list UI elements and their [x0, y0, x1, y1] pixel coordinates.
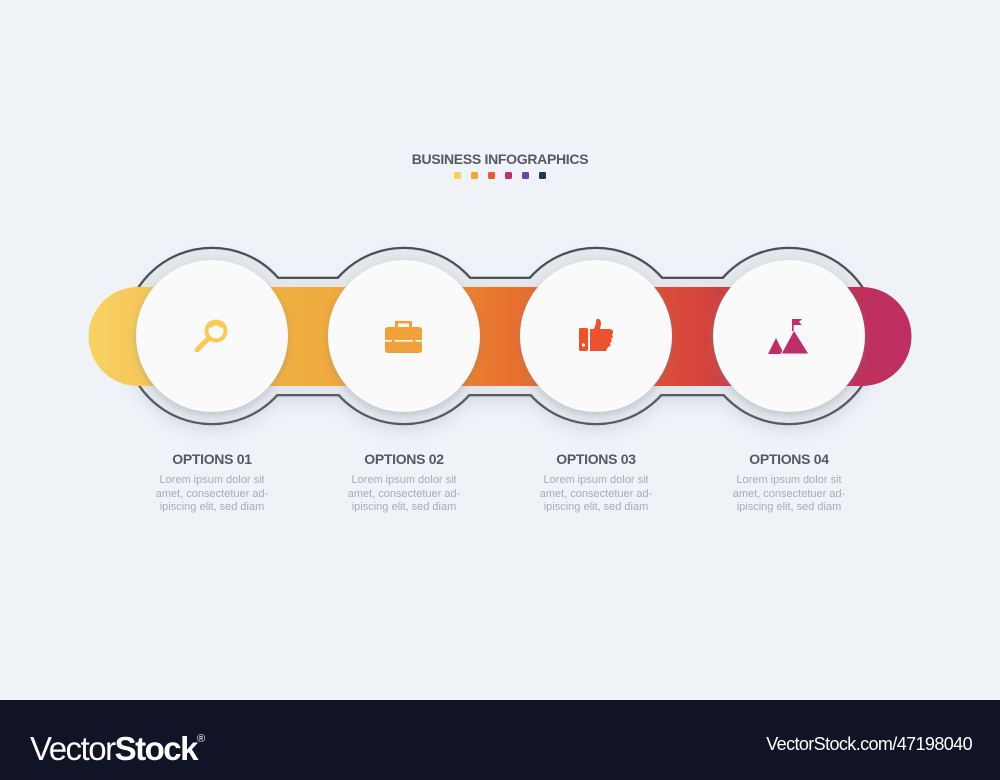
option 2 text: OPTIONS 02	[364, 451, 444, 467]
circle 2	[328, 260, 480, 412]
option 1 text: Lorem ipsum dolor sit	[159, 474, 265, 486]
option 2 text: amet, consectetuer ad-	[348, 488, 460, 500]
icon: thumbs up	[579, 319, 613, 351]
option 2 text: Lorem ipsum dolor sit	[351, 474, 457, 486]
option 4 text: amet, consectetuer ad-	[733, 488, 845, 500]
option 3 text: amet, consectetuer ad-	[540, 488, 652, 500]
option 2 text	[348, 451, 460, 513]
option 3 text: OPTIONS 03	[556, 451, 636, 467]
icon: briefcase	[385, 321, 422, 353]
footer url: VectorStock.com/47198040	[766, 734, 972, 754]
color dots	[454, 172, 546, 179]
option 1 text: amet, consectetuer ad-	[156, 488, 268, 500]
option 1 text	[156, 451, 268, 513]
option 1 text: ipiscing elit, sed diam	[160, 501, 264, 513]
option 2 text: ipiscing elit, sed diam	[352, 501, 456, 513]
footer logo: VectorStock®	[30, 730, 204, 767]
option 4 text: OPTIONS 04	[749, 451, 829, 467]
option 4 text: Lorem ipsum dolor sit	[736, 474, 842, 486]
option 3 text: ipiscing elit, sed diam	[544, 501, 648, 513]
color band	[88, 287, 911, 386]
option 1 text: OPTIONS 01	[172, 451, 252, 467]
footer bar	[0, 700, 1000, 780]
outline frame	[124, 248, 877, 424]
option 4 text: ipiscing elit, sed diam	[737, 501, 841, 513]
option 3 text: Lorem ipsum dolor sit	[543, 474, 649, 486]
title: BUSINESS INFOGRAPHICS	[412, 151, 588, 167]
circle 1	[136, 260, 288, 412]
icon: magnifier	[197, 322, 226, 350]
option 3 text	[540, 451, 652, 513]
option 4 text	[733, 451, 845, 513]
circle 4	[713, 260, 865, 412]
circle 3	[520, 260, 672, 412]
icon: mountain flag	[768, 319, 809, 354]
